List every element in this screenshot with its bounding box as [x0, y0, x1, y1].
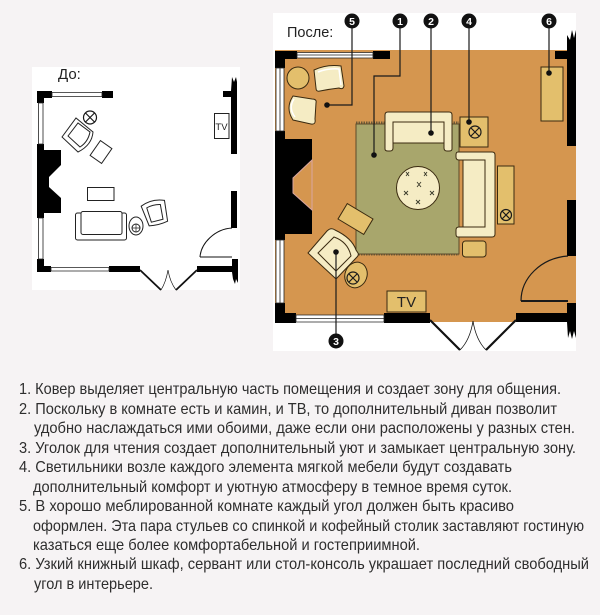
panel: before floor plan [32, 66, 240, 290]
sofa right [456, 152, 495, 237]
sofa top [385, 112, 452, 151]
TV: after [387, 291, 426, 312]
numbered explanation list: угол в интерьере. [34, 576, 153, 593]
side table: before [90, 141, 112, 163]
callout 4: 4 [466, 16, 472, 28]
sofa: before [76, 212, 126, 240]
callout 1 [371, 14, 408, 158]
rug [356, 123, 459, 254]
walls and windows: after [275, 30, 576, 351]
oval lamp table [341, 259, 371, 291]
double door: before [140, 270, 197, 290]
numbered explanation list: 1. Ковер выделяет центральную часть помещения и создает зону для общения. [19, 381, 561, 398]
side door: before [200, 228, 232, 257]
coffee table: before [88, 188, 114, 200]
TV: before [214, 114, 229, 138]
callout 5: 5 [349, 16, 355, 28]
armchair 2: before [141, 198, 170, 228]
numbered explanation list: 5. В хорошо меблированной комнате каждый угол должен быть красиво [19, 498, 514, 515]
callout 3: 3 [333, 336, 339, 348]
TV: before: TV [215, 122, 228, 133]
callout 1: 1 [397, 16, 403, 28]
numbered explanation list: дополнительный комфорт и уютную атмосферу в темное время суток. [33, 479, 512, 496]
callout 2 [424, 14, 438, 136]
round table corner [287, 67, 309, 89]
lamp table top [460, 117, 488, 147]
round lamp table: before [129, 217, 143, 235]
heading: after: После: [287, 25, 333, 41]
callout 6 [542, 14, 556, 76]
ottoman [462, 241, 486, 257]
side door: after [521, 256, 568, 301]
callout 3 [328, 249, 344, 348]
bookcase [541, 67, 563, 121]
orange floor [275, 50, 576, 322]
numbered explanation list [19, 381, 589, 593]
heading: before: До: [58, 66, 81, 83]
armchair: before [62, 118, 93, 152]
round coffee table [396, 166, 440, 210]
reading armchair [308, 229, 358, 278]
callout 6: 6 [546, 16, 552, 28]
numbered explanation list: 4. Светильники возле каждого элемента мягкой мебели будут создавать [19, 459, 512, 476]
callout 4 [462, 14, 476, 125]
double door: after [430, 320, 516, 350]
walls and windows: before [37, 77, 238, 284]
chair pair [289, 66, 344, 124]
callout 5 [324, 14, 360, 108]
numbered explanation list: казаться еще более комфортабельной и гостеприимной. [33, 537, 420, 554]
console right [498, 166, 514, 224]
panel: after floor plan [273, 13, 576, 351]
lamp: before [84, 111, 96, 124]
TV: after: TV [397, 294, 416, 311]
callout 2: 2 [428, 16, 434, 28]
rotated side table [338, 204, 373, 234]
numbered explanation list: 2. Поскольку в комнате есть и камин, и ТВ, то дополнительный диван позволит [19, 401, 558, 418]
